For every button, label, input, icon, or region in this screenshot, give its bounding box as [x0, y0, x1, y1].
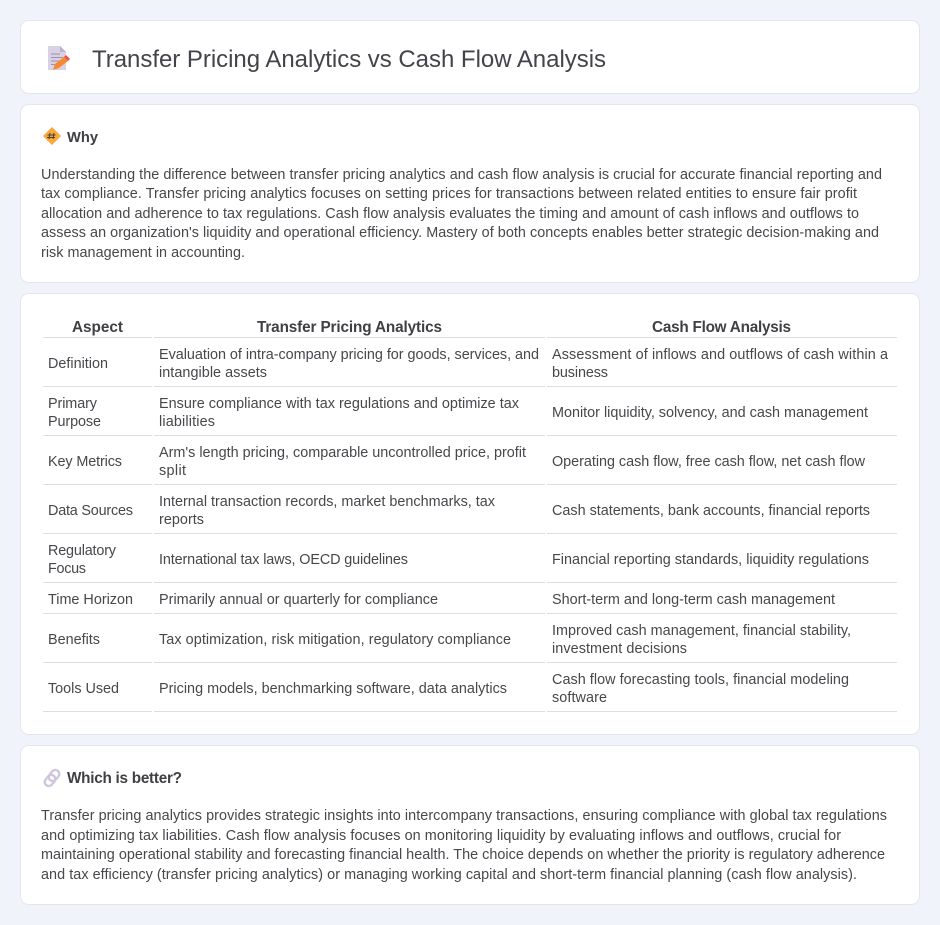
row: primary purpose: Purpose — [48, 414, 101, 430]
row: data sources: Data Sources — [48, 503, 133, 519]
table header row — [72, 319, 791, 336]
text block: why explanation: Understanding the difference between transfer pricing analytics and cash flow analysis is crucial for accurate financial reporting and — [41, 167, 882, 183]
panel: title header — [20, 20, 920, 94]
title: Transfer Pricing Analytics vs Cash Flow Analysis — [92, 46, 606, 73]
table header row: Cash Flow Analysis — [652, 319, 791, 336]
table header row: Transfer Pricing Analytics — [257, 319, 442, 336]
row: definition: business — [552, 365, 608, 381]
row: benefits: Tax optimization, risk mitigation, regulatory compliance — [159, 632, 511, 648]
row: regulatory focus: Focus — [48, 561, 86, 577]
row: data sources: Cash statements, bank accounts, financial reports — [552, 503, 870, 519]
row: data sources: reports — [159, 512, 204, 528]
row: regulatory focus — [48, 543, 869, 577]
row: key metrics: Key Metrics — [48, 454, 122, 470]
row: benefits: investment decisions — [552, 641, 687, 657]
row: time horizon: Primarily annual or quarterly for compliance — [159, 592, 438, 608]
row: tools used: Cash flow forecasting tools, financial modeling — [552, 672, 849, 688]
text block: which is better explanation: and optimizing tax liabilities. Cash flow analysis focuses on monitoring liquidity by evaluating inflows and outflows, crucial for — [41, 828, 841, 844]
panel: why — [20, 104, 920, 282]
icon: document with pencil — [48, 46, 70, 70]
table header row: Aspect — [72, 319, 123, 336]
row: key metrics: split — [159, 463, 186, 479]
row: primary purpose: liabilities — [159, 414, 215, 430]
text block: which is better explanation: and tax efficiency (transfer pricing analytics) or managing working capital and short-term financial planning (cash flow analysis). — [41, 867, 857, 883]
row: definition: Definition — [48, 356, 108, 372]
row: tools used: Tools Used — [48, 681, 119, 697]
row: benefits: Benefits — [48, 632, 100, 648]
row: regulatory focus: Financial reporting standards, liquidity regulations — [552, 552, 869, 568]
heading: why: Why — [67, 130, 99, 146]
row: regulatory focus: International tax laws, OECD guidelines — [159, 552, 408, 568]
text block: why explanation: risk management in accounting. — [41, 245, 245, 261]
heading: which is better: Which is better? — [67, 770, 182, 787]
row: key metrics — [48, 445, 866, 479]
row: data sources — [48, 494, 870, 528]
row: definition: Assessment of inflows and outflows of cash within a — [552, 347, 888, 363]
row: key metrics: Arm's length pricing, comparable uncontrolled price, profit — [159, 445, 526, 461]
row: data sources: Internal transaction records, market benchmarks, tax — [159, 494, 496, 510]
text block: which is better explanation: Transfer pricing analytics provides strategic insights into intercompany transactions, ensuring compliance with global tax regulations — [41, 808, 887, 824]
row: benefits — [48, 623, 851, 657]
panel: which is better — [20, 746, 920, 904]
icon: chain link — [43, 768, 61, 788]
row: primary purpose: Ensure compliance with tax regulations and optimize tax — [159, 396, 520, 412]
row: time horizon: Short-term and long-term cash management — [552, 592, 835, 608]
row: definition: intangible assets — [159, 365, 267, 381]
row: primary purpose: Monitor liquidity, solvency, and cash management — [552, 405, 868, 421]
text block: why explanation: tax compliance. Transfer pricing analytics focuses on setting prices for transactions between related entities to ensure fair profit — [41, 186, 857, 202]
row: definition — [48, 347, 888, 381]
row: regulatory focus: Regulatory — [48, 543, 117, 559]
row: tools used — [48, 672, 849, 706]
row: definition: Evaluation of intra-company pricing for goods, services, and — [159, 347, 539, 363]
row: time horizon: Time Horizon — [48, 592, 133, 608]
row: primary purpose — [48, 396, 868, 430]
text block: which is better explanation: maintaining operational stability and forecasting financial health. The choice depends on whether the priority is regulatory adherence — [41, 847, 885, 863]
text block: which is better explanation — [41, 808, 887, 883]
panel: comparison table — [20, 294, 920, 734]
icon: orange diamond — [44, 128, 60, 144]
row: benefits: Improved cash management, financial stability, — [552, 623, 851, 639]
row: primary purpose: Primary — [48, 396, 98, 412]
row: tools used: software — [552, 690, 607, 706]
text block: why explanation: allocation and adherence to tax regulations. Cash flow analysis evaluates the timing and amount of cash inflows and outflows to — [41, 206, 859, 222]
row: tools used: Pricing models, benchmarking software, data analytics — [159, 681, 507, 697]
text block: why explanation — [41, 167, 882, 261]
text block: why explanation: assess an organization's liquidity and operational efficiency. Mastery of both concepts enables better strategic decision-making and — [41, 225, 879, 241]
row: key metrics: Operating cash flow, free cash flow, net cash flow — [552, 454, 866, 470]
row: time horizon — [48, 592, 835, 608]
